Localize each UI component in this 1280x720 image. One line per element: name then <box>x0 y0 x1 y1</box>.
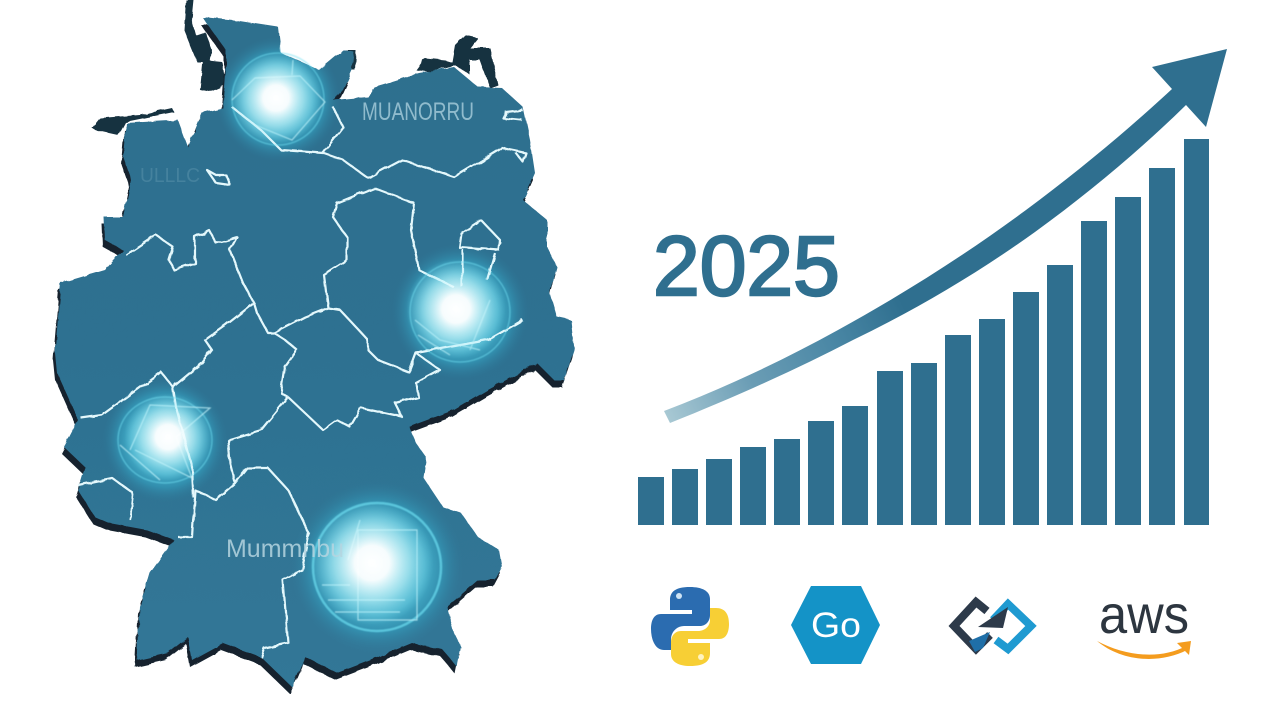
map: extruded shadow <box>53 24 572 694</box>
map: hub rings <box>118 53 510 631</box>
map: land <box>55 17 574 687</box>
map label: faint west: ULLLC <box>140 165 200 187</box>
map of Germany <box>53 0 574 694</box>
icon: Go hexagon logo: Go <box>811 606 861 645</box>
icon: python logo <box>651 587 729 666</box>
growth arrow <box>664 49 1227 423</box>
bar chart <box>638 139 1209 525</box>
map label: south: Mummnbu <box>226 535 344 563</box>
map: state borders <box>78 107 526 657</box>
icon: chain diamond logo <box>954 602 1031 652</box>
map: hub core highlights <box>124 52 506 625</box>
year heading: 2025 <box>653 219 840 313</box>
map: glow halos <box>103 37 528 653</box>
map label: north: MUANORRU <box>362 98 474 126</box>
map: islands <box>92 0 498 135</box>
icon: aws logo: aws <box>1099 585 1189 645</box>
icon: Go hexagon logo <box>791 586 880 664</box>
